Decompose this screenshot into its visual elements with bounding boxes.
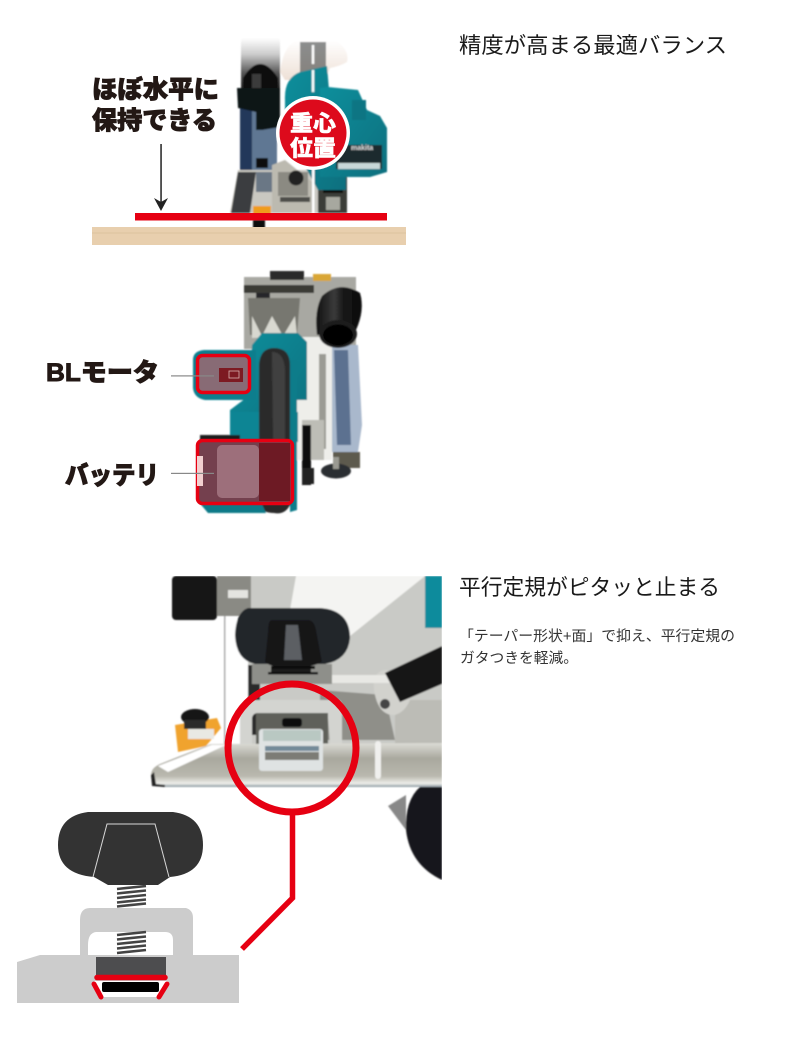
- diagram: black core: [102, 982, 159, 992]
- wood board: [92, 227, 406, 245]
- diagram: lower spring: [117, 932, 146, 953]
- photo: guide clamp close-up: [151, 576, 442, 880]
- label: battery: バッテリ: [65, 462, 159, 490]
- diagram: white channel: [94, 981, 168, 997]
- label: nearly horizontal: 保持できる: [92, 107, 217, 135]
- label: nearly horizontal: ほぼ水平に: [92, 76, 219, 104]
- diagram: knob: [58, 812, 203, 885]
- diagram: clamp cross-section: [17, 812, 239, 1003]
- heading: optimal balance: 精度が高まる最適バランス: [459, 33, 727, 58]
- heading: parallel guide: 平行定規がピタッと止まる: [459, 575, 720, 600]
- badge: centre of gravity: 位置: [290, 136, 336, 161]
- badge: centre of gravity: [276, 96, 350, 170]
- label: BL motor: BLモータ: [46, 359, 159, 387]
- highlight: battery: [197, 440, 292, 504]
- red level line: [135, 213, 387, 220]
- diagram: red contact surface: [97, 975, 165, 980]
- body text: [459, 628, 735, 667]
- diagram: red taper left: [94, 984, 101, 997]
- highlight: BL motor: [198, 356, 250, 392]
- badge: centre of gravity: 重心: [290, 111, 336, 136]
- body text: 「テーパー形状+面」で抑え、平行定規の: [459, 628, 735, 645]
- diagram: guide block: [96, 957, 166, 977]
- leader: battery: [171, 473, 214, 474]
- diagram: upper spring: [117, 886, 146, 906]
- arrow: down to level line: [154, 144, 168, 211]
- body text: ガタつきを軽減。: [460, 650, 578, 667]
- photo: saw top view: [193, 271, 362, 513]
- callout: red circle and leader: [228, 684, 356, 949]
- label: nearly horizontal: [92, 76, 219, 135]
- leader: BL motor: [171, 375, 214, 376]
- diagram: red taper right: [159, 984, 167, 997]
- photo: saw front view: [230, 38, 387, 229]
- diagram: base plate: [17, 955, 239, 1003]
- photo: saw front view: makita: [351, 145, 373, 152]
- diagram: bracket: [80, 908, 193, 957]
